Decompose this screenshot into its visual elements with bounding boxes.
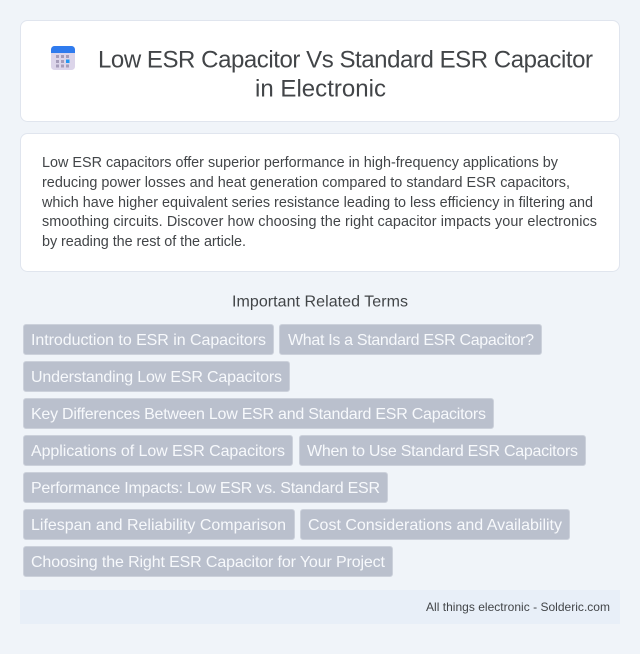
title: in Electronic (255, 76, 386, 102)
title (98, 46, 593, 102)
panel: intro description (20, 134, 620, 272)
tag: standard ESR: What Is a Standard ESR Capacitor? (288, 332, 534, 349)
text block: description: reducing power losses and heat generation compared to standard ESR capacitors, (42, 175, 570, 191)
tag: cost: Cost Considerations and Availability (308, 517, 562, 534)
heading: important related terms: Important Related Terms (232, 294, 408, 310)
footer: All things electronic - Solderic.com (426, 600, 610, 614)
text block: description: smoothing circuits. Discover how choosing the right capacitor impacts your electronics (42, 214, 597, 230)
text block: description: which have higher equivalent series resistance leading to less efficiency in filtering and (41, 195, 593, 211)
tag: understanding low ESR (24, 362, 290, 392)
tag: introduction: Introduction to ESR in Capacitors (31, 332, 266, 349)
text block: description: Low ESR capacitors offer superior performance in high-frequency applications by (42, 155, 559, 171)
tag: lifespan (24, 510, 294, 540)
tag: cost (300, 510, 570, 540)
tag: choosing (24, 546, 392, 576)
footer (20, 590, 620, 624)
tag list: related terms (24, 324, 586, 576)
tag: key differences (24, 398, 494, 428)
tag: performance impacts (24, 472, 388, 502)
tag: introduction (24, 324, 274, 354)
panel: title card (20, 20, 620, 122)
tag: lifespan: Lifespan and Reliability Comparison (31, 517, 286, 534)
tag: performance impacts: Performance Impacts: Low ESR vs. Standard ESR (31, 480, 380, 497)
tag: choosing: Choosing the Right ESR Capacitor for Your Project (31, 554, 386, 571)
tag: understanding low ESR: Understanding Low ESR Capacitors (31, 369, 282, 386)
tag: when to use (300, 436, 586, 466)
tag: when to use: When to Use Standard ESR Capacitors (307, 443, 578, 460)
title: Low ESR Capacitor Vs Standard ESR Capacitor (98, 46, 593, 74)
icon: calendar grid (51, 46, 75, 70)
tag: standard ESR (280, 324, 542, 354)
tag: applications (24, 436, 292, 466)
tag: applications: Applications of Low ESR Capacitors (31, 443, 285, 460)
text block: description: by reading the rest of the article. (42, 234, 246, 250)
text block: description (41, 155, 597, 250)
tag: key differences: Key Differences Between Low ESR and Standard ESR Capacitors (31, 406, 486, 423)
